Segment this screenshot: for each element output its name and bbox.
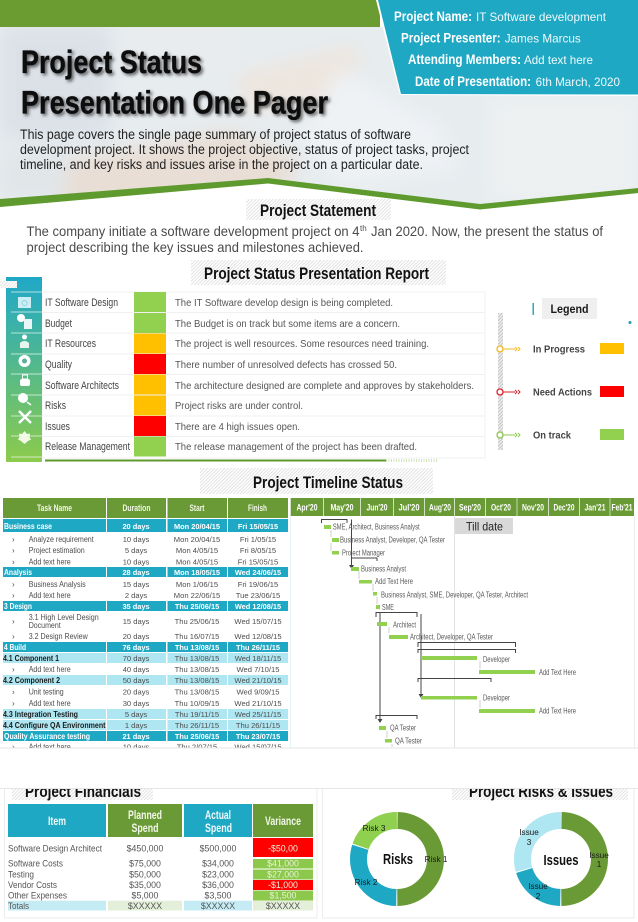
row: business analysis: Business Analysis xyxy=(29,580,86,589)
row: integration testing: 4.3 Integration Testing xyxy=(3,710,78,719)
row: design review: 3.2 Design Review xyxy=(29,632,88,641)
heading: timeline: Project Timeline Status xyxy=(253,474,403,492)
row: build: Thu 13/08/15 xyxy=(175,643,219,652)
row: clipped add text xyxy=(12,742,282,752)
row: add text: 40 days xyxy=(123,665,149,674)
row: add text: › xyxy=(12,558,15,566)
task table xyxy=(3,498,288,752)
row: integration testing: Wed 25/11/15 xyxy=(235,710,281,719)
row: configure qa xyxy=(3,721,280,730)
row: add text: Add text here xyxy=(29,699,71,708)
row: project estimation: 5 days xyxy=(125,546,147,555)
row: analysis: Analysis xyxy=(4,568,32,577)
row: business analysis: Fri 19/06/15 xyxy=(238,580,278,589)
legend heading xyxy=(498,298,632,450)
row: software costs: Software Costs xyxy=(8,858,63,870)
legend: on track: On track xyxy=(533,430,571,442)
heading: financials: Project Financials xyxy=(25,782,141,801)
row labels: Release Management xyxy=(45,441,130,453)
attending members: Attending Members: xyxy=(408,52,521,67)
row: project estimation: Fri 8/05/15 xyxy=(240,546,276,555)
row: analysis: Mon 18/05/15 xyxy=(174,568,220,577)
row: unit testing: Thu 13/08/15 xyxy=(175,688,219,696)
project info box: Add text here xyxy=(524,53,593,67)
row: clipped add text: Add text here xyxy=(29,742,71,752)
row: design review: Thu 16/07/15 xyxy=(175,632,219,641)
main title: Presentation One Pager xyxy=(21,84,328,120)
project statement text xyxy=(26,223,603,255)
row labels xyxy=(45,297,130,453)
row: clipped add text: 10 days xyxy=(123,742,149,752)
row: software design architect: $450,000 xyxy=(127,844,163,854)
project info box: James Marcus xyxy=(505,32,581,46)
row: business case: 20 days xyxy=(122,522,150,531)
status descriptions: The architecture designed are complete and approves by stakeholders. xyxy=(175,381,474,392)
row: design review: 20 days xyxy=(123,632,149,641)
row: component 1 xyxy=(3,654,281,663)
resource labels: Business Analyst, Developer, QA Tester xyxy=(340,536,445,545)
chart: issues donut: 2 xyxy=(536,892,541,901)
row: unit testing: › xyxy=(12,688,15,696)
resource labels: Architect, Developer, QA Tester xyxy=(410,633,493,642)
icon: budget xyxy=(17,314,32,329)
row: add text: Fri 15/05/15 xyxy=(238,558,278,566)
resource labels: Developer xyxy=(483,655,510,664)
row: add text xyxy=(12,558,278,566)
row: quality assurance: Thu 25/06/15 xyxy=(175,732,219,741)
row: project estimation: Project estimation xyxy=(29,546,85,555)
row: testing: $50,000 xyxy=(129,870,161,880)
row: component 2: 50 days xyxy=(123,676,149,685)
row: high level design: Wed 15/07/15 xyxy=(234,617,282,626)
row: project estimation xyxy=(12,546,276,555)
row: other expenses: $1,500 xyxy=(270,890,297,900)
row: totals xyxy=(8,901,300,912)
row: other expenses: $3,500 xyxy=(205,890,232,900)
resource labels: Architect xyxy=(393,621,417,630)
row: project estimation: › xyxy=(12,546,15,555)
row: project estimation: Mon 4/05/15 xyxy=(176,546,218,555)
icon: release xyxy=(18,431,31,444)
summary brackets xyxy=(322,520,516,720)
panel: legend xyxy=(497,298,632,450)
row: add text xyxy=(12,665,279,674)
icon: resources xyxy=(20,334,29,348)
row: business case: Mon 20/04/15 xyxy=(174,522,220,531)
row: analysis: 28 days xyxy=(122,568,150,577)
resource labels: SME xyxy=(382,603,394,612)
status descriptions: There number of unresolved defects has crossed 50. xyxy=(175,360,397,371)
row: business case xyxy=(4,522,278,531)
row: quality assurance: Thu 23/07/15 xyxy=(236,732,280,741)
table header: Duration xyxy=(122,503,150,513)
row: design: 35 days xyxy=(122,602,150,611)
row: other expenses xyxy=(8,890,297,902)
row: high level design: Document xyxy=(29,621,61,630)
row: add text xyxy=(12,591,280,600)
project info box: IT Software development xyxy=(476,10,607,24)
row: analysis xyxy=(4,568,281,577)
row: add text: Add text here xyxy=(29,665,71,674)
row: add text: › xyxy=(12,591,15,600)
row: design review: › xyxy=(12,632,15,641)
status blocks xyxy=(134,292,166,456)
row: testing: $27,000 xyxy=(267,870,299,880)
icon: quality xyxy=(18,355,30,367)
row: high level design: Thu 25/06/15 xyxy=(175,617,219,626)
status descriptions: Project risks are under control. xyxy=(175,401,303,412)
row: analyze requirement: Analyze requirement xyxy=(29,535,94,544)
row: design review: Wed 12/08/15 xyxy=(234,632,282,641)
row: configure qa: 1 days xyxy=(125,721,147,730)
chart: risks donut: Risks xyxy=(383,851,413,868)
row: vendor costs: -$1,000 xyxy=(268,880,298,890)
status descriptions xyxy=(175,298,474,453)
chart: issues donut: Issue xyxy=(528,882,548,891)
row: unit testing: Unit testing xyxy=(29,688,64,696)
month header: Sep'20 xyxy=(459,502,481,512)
heading: project statement: Project Statement xyxy=(260,202,376,220)
row: software design architect xyxy=(8,844,298,854)
financial table header: Planned xyxy=(128,808,162,822)
chart: issues donut xyxy=(519,820,609,901)
table header: Start xyxy=(190,503,205,513)
task bars xyxy=(324,525,535,742)
project statement text: project describing the key issues and milestones achieved. xyxy=(26,239,364,255)
row: vendor costs: $36,000 xyxy=(202,880,234,890)
row: quality assurance: 21 days xyxy=(122,732,150,741)
row: design: Wed 12/08/15 xyxy=(235,602,281,611)
row: component 2: Thu 13/08/15 xyxy=(175,676,219,685)
row: totals: $XXXXX xyxy=(266,901,300,911)
row: high level design: › xyxy=(12,617,15,626)
row: component 1: Wed 18/11/15 xyxy=(235,654,281,663)
heading: status report xyxy=(191,260,446,285)
chart: risks donut: Risk 2 xyxy=(355,878,378,887)
row: design: 3 Design xyxy=(4,602,32,611)
row: business analysis: Mon 1/06/15 xyxy=(176,580,218,589)
row: component 1: 4.1 Component 1 xyxy=(3,654,59,663)
row: design: Thu 25/06/15 xyxy=(175,602,219,611)
chart: issues donut: 1 xyxy=(597,860,602,869)
top green band xyxy=(0,0,380,27)
month header: May'20 xyxy=(330,502,354,512)
row: add text: › xyxy=(12,699,15,708)
month header: Apr'20 xyxy=(296,502,318,512)
band fills xyxy=(3,519,288,741)
row: configure qa: Thu 26/11/15 xyxy=(175,721,219,730)
main title xyxy=(21,44,328,120)
row: other expenses: $5,000 xyxy=(132,890,159,900)
row: software costs: $41,000 xyxy=(267,858,299,868)
status descriptions: There are 4 high issues open. xyxy=(175,422,300,433)
month header: Jul'20 xyxy=(398,502,420,512)
row: integration testing: Thu 19/11/15 xyxy=(175,710,219,719)
white area below zigzag xyxy=(0,181,638,225)
row: software costs: $75,000 xyxy=(129,858,161,868)
row: configure qa: 4.4 Configure QA Environment xyxy=(3,721,106,730)
row: component 2 xyxy=(3,676,282,685)
financial table header xyxy=(8,804,313,837)
chart: risks donut: Risk 3 xyxy=(363,824,386,833)
row: add text: 10 days xyxy=(123,558,149,566)
icon: architects xyxy=(20,375,30,386)
row: design review xyxy=(12,632,282,641)
row: business case: Business case xyxy=(4,522,52,531)
row: build: Thu 26/11/15 xyxy=(236,643,280,652)
financial table header: Item xyxy=(48,814,66,828)
row: component 1: 70 days xyxy=(123,654,149,663)
row: totals: Totals xyxy=(8,901,29,912)
legend: in progress: In Progress xyxy=(533,344,585,356)
panel: project financials xyxy=(4,782,317,918)
intro paragraph xyxy=(20,127,469,172)
row: business analysis xyxy=(12,580,278,589)
row: integration testing: 5 days xyxy=(125,710,147,719)
row: quality assurance xyxy=(4,732,280,741)
row: vendor costs xyxy=(8,880,298,891)
resource labels: Add Text Here xyxy=(539,707,576,716)
row: software design architect: $500,000 xyxy=(200,844,236,854)
row: analyze requirement: Mon 20/04/15 xyxy=(174,535,220,544)
heading: timeline xyxy=(200,468,433,494)
chart: risks donut: Risk 1 xyxy=(425,855,448,864)
row: add text: Mon 4/05/15 xyxy=(176,558,218,566)
row: add text: Thu 13/08/15 xyxy=(175,665,219,674)
month header: Jan'21 xyxy=(584,502,606,512)
row: component 2: 4.2 Component 2 xyxy=(3,676,60,685)
row labels: Quality xyxy=(45,359,72,371)
row: component 2: Wed 21/10/15 xyxy=(234,676,282,685)
main title: Project Status xyxy=(21,44,202,80)
row: testing: $23,000 xyxy=(202,870,234,880)
project presenter: Project Presenter: xyxy=(401,30,501,46)
gantt chart xyxy=(290,498,634,748)
month header: Jun'20 xyxy=(366,502,388,512)
row grid xyxy=(42,292,485,458)
month header: Nov'20 xyxy=(522,502,544,512)
row: add text: Wed 21/10/15 xyxy=(234,699,282,708)
financial table header: Actual xyxy=(205,808,231,822)
legend heading: Legend xyxy=(550,302,588,316)
project info box: 6th March, 2020 xyxy=(536,75,620,89)
legend: need actions xyxy=(497,386,624,398)
month header: Aug'20 xyxy=(429,502,451,512)
row labels: Issues xyxy=(45,421,70,433)
resource labels: SME, Architect, Business Analyst xyxy=(333,523,420,532)
row: add text: 30 days xyxy=(123,699,149,708)
icon: design xyxy=(18,297,31,308)
progress line xyxy=(45,460,437,462)
row: vendor costs: $35,000 xyxy=(129,880,161,890)
row: software costs xyxy=(8,858,299,870)
resource labels: QA Tester xyxy=(395,737,422,746)
row: component 1: Thu 13/08/15 xyxy=(175,654,219,663)
resource labels: Developer xyxy=(483,694,510,703)
row: add text: Add text here xyxy=(29,591,71,600)
row: unit testing: Wed 9/09/15 xyxy=(237,688,279,696)
chart: issues donut: Issue xyxy=(589,851,609,860)
row: integration testing xyxy=(3,710,281,719)
row: software costs: $34,000 xyxy=(202,858,234,868)
row: totals: $XXXXX xyxy=(128,901,162,911)
row labels: Software Architects xyxy=(45,380,119,392)
row: configure qa: Thu 26/11/15 xyxy=(236,721,280,730)
heading: status report: Project Status Presentation Report xyxy=(204,264,429,283)
row: vendor costs: Vendor Costs xyxy=(8,880,57,891)
icon: risks xyxy=(18,393,31,405)
row: analyze requirement: 10 days xyxy=(123,535,149,544)
row: add text: 2 days xyxy=(125,591,147,600)
icon strip xyxy=(0,277,42,462)
intro paragraph: This page covers the single page summary of project status of software xyxy=(20,127,411,142)
chart: issues donut: 3 xyxy=(527,838,532,847)
row: add text: Mon 22/06/15 xyxy=(174,591,220,600)
row: high level design: 3.1 High Level Design xyxy=(29,613,99,622)
row labels: Risks xyxy=(45,400,66,412)
light band fills xyxy=(3,653,288,730)
row: clipped add text: Thu 2/07/15 xyxy=(177,742,217,752)
header photo background xyxy=(0,27,638,212)
resource labels: Add Text Here xyxy=(375,577,413,586)
legend: in progress xyxy=(497,343,624,356)
row: analysis: Wed 24/06/15 xyxy=(235,568,281,577)
row: high level design xyxy=(12,613,282,630)
financial table header: Spend xyxy=(132,821,158,835)
row: unit testing: 20 days xyxy=(123,688,149,696)
row: business case: Fri 15/05/15 xyxy=(238,522,278,531)
till date marker xyxy=(455,518,513,534)
row labels: Budget xyxy=(45,318,72,330)
row: business analysis: 15 days xyxy=(123,580,149,589)
month header xyxy=(291,498,634,516)
status descriptions: The project is well resources. Some resources need training. xyxy=(175,339,429,350)
table header: Task Name xyxy=(37,503,72,513)
status descriptions: The IT Software develop design is being completed. xyxy=(175,298,393,309)
dependency connectors xyxy=(331,530,480,747)
row: add text: Thu 10/09/15 xyxy=(175,699,219,708)
resource labels: Business Analyst, SME, Developer, QA Tester, Architect xyxy=(381,591,529,600)
row: analyze requirement xyxy=(12,535,276,544)
chart: issues donut: Issue xyxy=(519,828,539,837)
project statement text: Jan 2020. Now, the present the status of xyxy=(371,223,603,239)
resource labels: Project Manager xyxy=(342,549,385,558)
critical path arrowheads xyxy=(349,565,424,723)
row: analyze requirement: Fri 1/05/15 xyxy=(240,535,276,544)
row: add text: Add text here xyxy=(29,558,71,566)
green zigzag divider xyxy=(0,178,638,210)
intro paragraph: development project. It shows the project objective, status of project tasks, project xyxy=(20,142,469,157)
row: build: 4 Build xyxy=(4,643,26,652)
row: build: 76 days xyxy=(122,643,150,652)
variance cells xyxy=(253,838,313,900)
row: add text: Wed 7/10/15 xyxy=(237,665,279,674)
table header xyxy=(3,498,288,518)
row: build xyxy=(4,643,280,652)
resource labels: Add Text Here xyxy=(539,668,576,677)
resource labels: Business Analyst xyxy=(361,565,407,574)
status descriptions: The release management of the project has been drafted. xyxy=(175,442,417,453)
row: design xyxy=(4,602,281,611)
row: software design architect: Software Design Architect xyxy=(8,844,102,854)
row: add text: Tue 23/06/15 xyxy=(236,591,280,600)
project info box xyxy=(376,0,638,96)
month header: Dec'20 xyxy=(554,502,574,512)
row: clipped add text: Wed 15/07/15 xyxy=(234,742,282,752)
row: unit testing xyxy=(12,688,279,696)
totals row fill xyxy=(8,901,313,910)
row: software design architect: -$50,00 xyxy=(268,844,298,854)
resource labels xyxy=(333,523,576,746)
row: add text: › xyxy=(12,665,15,674)
resource labels: QA Tester xyxy=(390,724,416,733)
chart: issues donut: Issues xyxy=(544,852,578,869)
row labels: IT Resources xyxy=(45,338,96,350)
row: other expenses: Other Expenses xyxy=(8,890,67,902)
status descriptions: The Budget is on track but some items are a concern. xyxy=(175,319,400,330)
legend: on track xyxy=(497,429,624,442)
table header: Finish xyxy=(248,503,267,513)
row: clipped add text: › xyxy=(12,742,15,752)
row: business analysis: › xyxy=(12,580,15,589)
row: analyze requirement: › xyxy=(12,535,15,544)
project statement text: The company initiate a software development project on 4 xyxy=(26,223,360,239)
till date marker: Till date xyxy=(466,520,503,534)
row labels: IT Software Design xyxy=(45,297,118,309)
date of presentation: Date of Presentation: xyxy=(415,74,531,89)
row: quality assurance: Quality Assurance testing xyxy=(4,732,90,741)
row: high level design: 15 days xyxy=(123,617,149,626)
icon: issues xyxy=(19,411,31,423)
panel: risks and issues xyxy=(322,782,634,918)
white gap mask between sections xyxy=(0,748,638,788)
row: add text xyxy=(12,699,282,708)
row: totals: $XXXXX xyxy=(201,901,235,911)
legend: need actions: Need Actions xyxy=(533,386,592,398)
panel: status report table xyxy=(0,277,485,462)
row: testing xyxy=(8,870,299,880)
financial table header: Variance xyxy=(265,814,301,828)
project name: Project Name: xyxy=(394,9,472,24)
intro paragraph: timeline, and key risks and issues arise in the project on a particular date. xyxy=(20,157,423,172)
month header: Oct'20 xyxy=(491,502,511,512)
financial table header: Spend xyxy=(205,821,232,835)
chart: risks donut xyxy=(355,820,448,898)
row: testing: Testing xyxy=(8,870,34,880)
project statement text: th xyxy=(360,224,367,233)
